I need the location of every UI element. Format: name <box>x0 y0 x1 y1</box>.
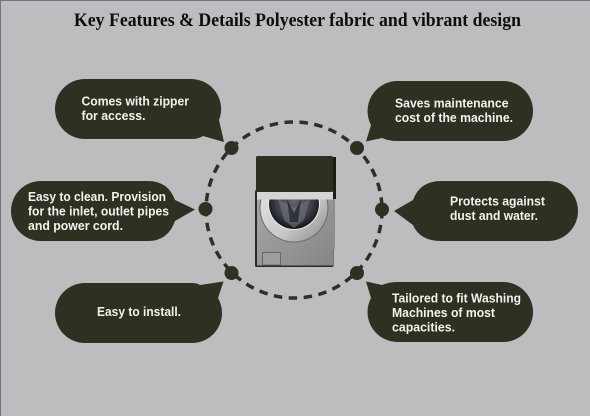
callout: maintenance: cost of the machine. <box>395 111 513 125</box>
callout: easy to clean <box>11 181 195 241</box>
callout: tailored fit: capacities. <box>392 320 455 334</box>
title: Key Features & Details Polyester fabric and vibrant design <box>74 10 521 31</box>
callout: maintenance <box>366 81 533 142</box>
callout: tailored fit <box>366 282 533 342</box>
washing machine with cover <box>255 156 336 267</box>
callout: zipper <box>55 79 224 142</box>
callout: dust and water: Protects against <box>450 194 546 208</box>
callout: tailored fit: Tailored to fit Washing <box>392 292 521 306</box>
callout: dust and water <box>394 181 578 241</box>
callout: easy to install: Easy to install. <box>97 305 181 319</box>
callout: maintenance: Saves maintenance <box>395 96 509 110</box>
callout: tailored fit: Machines of most <box>392 306 496 320</box>
callout: easy to clean: Easy to clean. Provision <box>28 190 166 204</box>
callout: dust and water: dust and water. <box>450 209 538 223</box>
callout: easy to clean: and power cord. <box>28 219 123 233</box>
node dots <box>198 141 389 280</box>
callout: zipper: for access. <box>82 109 146 123</box>
callout: easy to install <box>55 282 224 343</box>
callout: zipper: Comes with zipper <box>82 94 189 108</box>
callout: easy to clean: for the inlet, outlet pipes <box>28 204 169 218</box>
dashed ring <box>206 122 382 298</box>
